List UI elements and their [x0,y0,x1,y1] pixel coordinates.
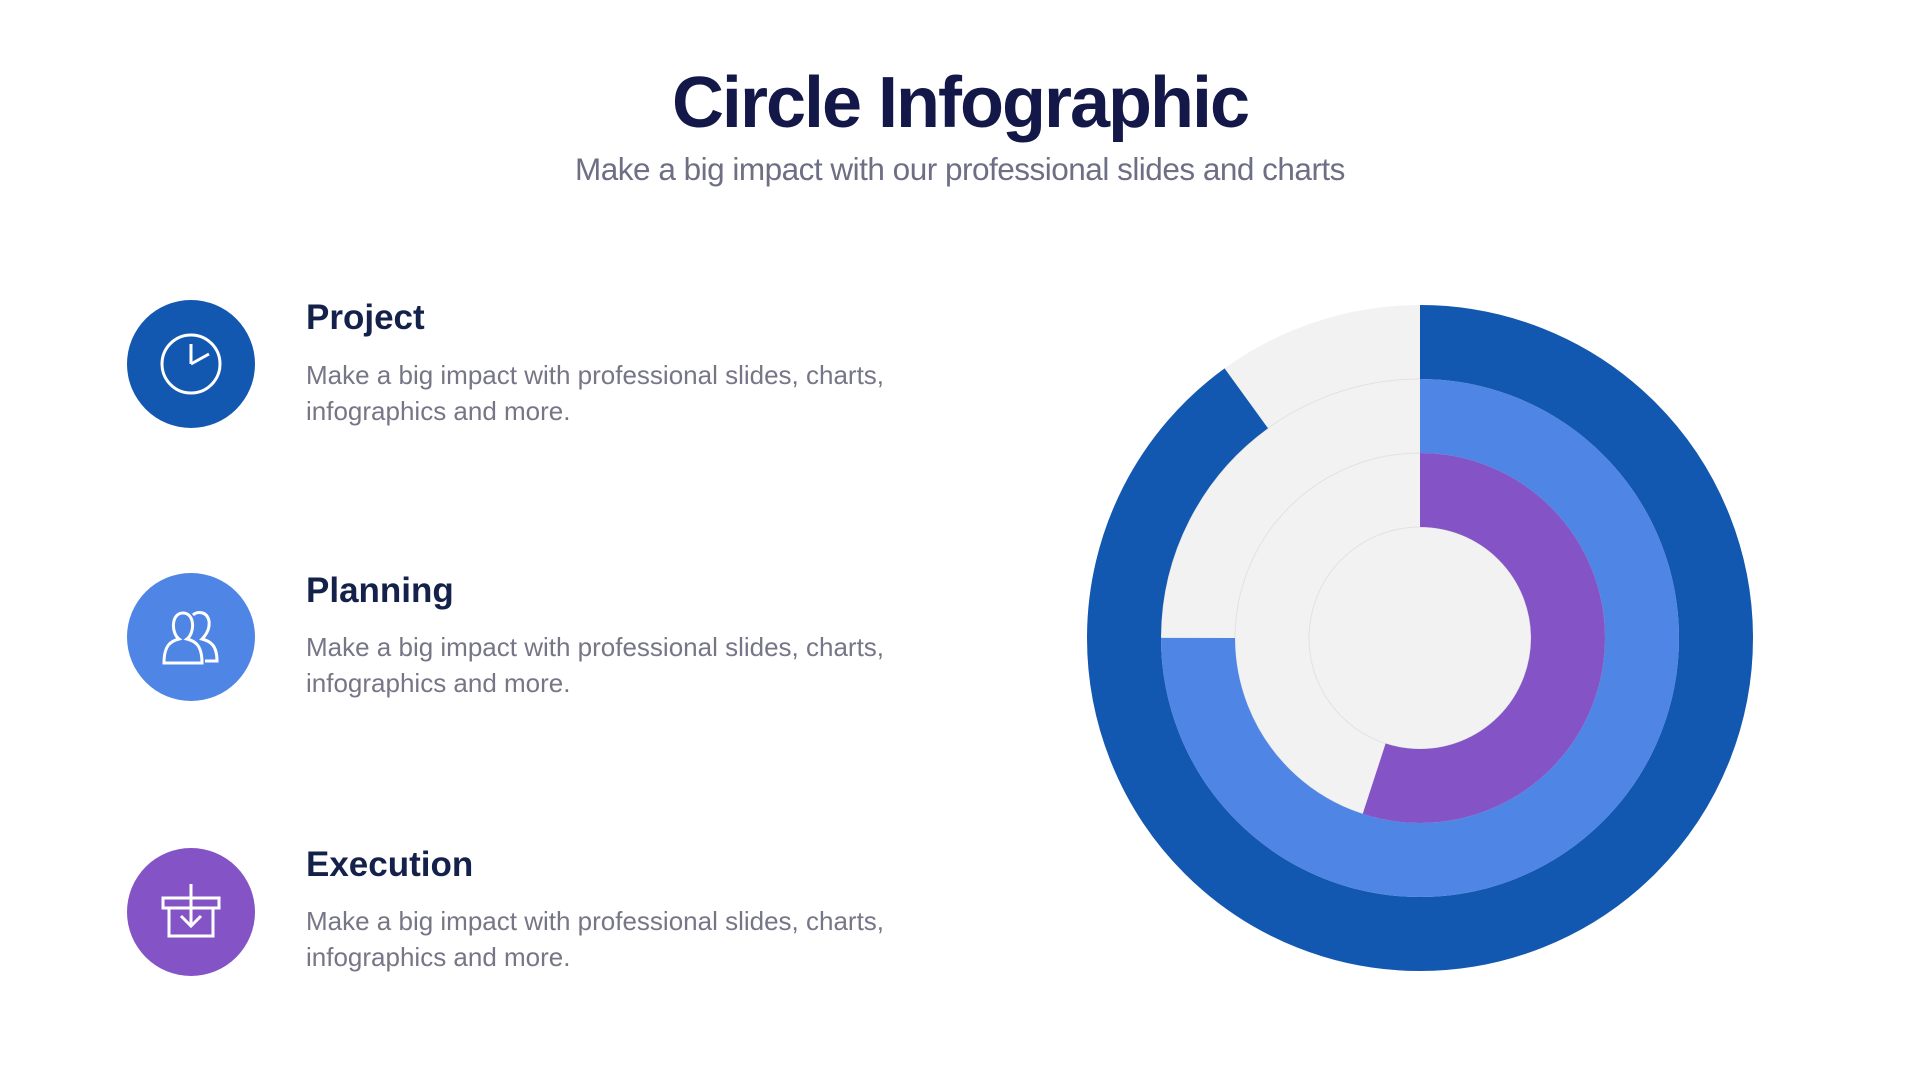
text: project: Make a big impact with professional slides, charts, [306,360,884,390]
icon: project [127,300,255,428]
icon: planning [127,573,255,701]
text: planning [306,632,884,698]
icon: execution [127,848,255,976]
heading: execution: Execution [306,845,473,884]
text: execution: Make a big impact with professional slides, charts, [306,906,884,936]
heading: project: Project [306,298,425,337]
text: project [306,360,884,426]
subtitle: Make a big impact with our professional slides and charts [575,151,1345,187]
title: Circle Infographic [672,63,1248,143]
text: execution [306,906,884,972]
text: execution: infographics and more. [306,942,570,972]
text: planning: Make a big impact with professional slides, charts, [306,632,884,662]
text: planning: infographics and more. [306,668,570,698]
text: project: infographics and more. [306,396,570,426]
heading: planning: Planning [306,571,454,610]
chart: concentric rings [1087,305,1753,971]
